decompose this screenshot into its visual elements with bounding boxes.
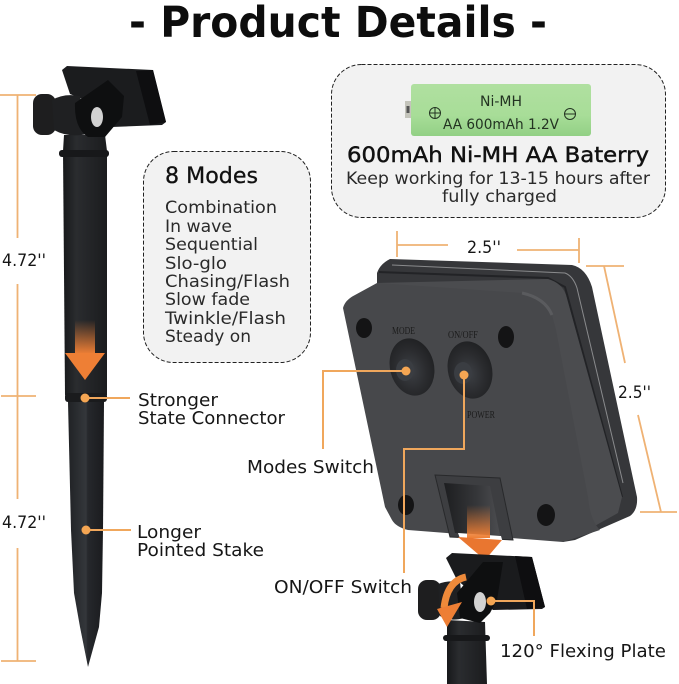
button labels xyxy=(392,325,495,421)
device photo xyxy=(343,259,637,560)
mounting plate xyxy=(62,66,166,127)
knob xyxy=(33,94,56,135)
battery heading: 600mAh Ni-MH AA Baterry xyxy=(347,143,649,167)
list of modes: Steady on xyxy=(165,327,251,347)
icon: battery: Ni-MH xyxy=(480,94,522,110)
stake product photo xyxy=(33,66,166,667)
battery description: Keep working for 13-15 hours after xyxy=(346,169,650,189)
button labels: ON/OFF xyxy=(448,329,478,341)
feature labels: ON/OFF Switch xyxy=(274,578,412,598)
bracket xyxy=(435,475,513,540)
hub xyxy=(52,95,88,135)
feature labels xyxy=(137,391,666,662)
dimension labels: 2.5'' xyxy=(618,383,651,403)
feature labels: Longer xyxy=(137,523,202,543)
feature labels: Pointed Stake xyxy=(137,541,264,561)
heading: 8 modes: 8 Modes xyxy=(165,164,258,189)
buttons xyxy=(384,334,440,400)
device back shell xyxy=(377,259,637,542)
battery description: fully charged xyxy=(442,187,557,207)
dimension labels xyxy=(2,238,651,533)
mounting holes xyxy=(356,318,555,526)
icon: downward arrow xyxy=(65,320,105,380)
list of modes: Sequential xyxy=(165,235,258,255)
panel: 8 modes xyxy=(144,152,310,362)
flexing plate photo xyxy=(418,553,545,684)
list of modes: Slow fade xyxy=(165,290,250,310)
list of modes: Slo-glo xyxy=(165,254,227,274)
list of modes xyxy=(164,198,290,347)
dimension labels: 2.5'' xyxy=(467,238,501,258)
battery description xyxy=(346,169,650,207)
icon: arrow into plate xyxy=(458,505,502,560)
callout lines and dots xyxy=(80,366,534,636)
feature labels: Modes Switch xyxy=(247,458,374,478)
icon: battery: AA 600mAh 1.2V xyxy=(443,117,559,133)
button labels: POWER xyxy=(467,409,495,421)
icon: battery xyxy=(405,84,591,136)
bolt xyxy=(91,107,103,127)
dimension labels: 4.72'' xyxy=(2,513,46,533)
list of modes: Twinkle/Flash xyxy=(164,309,286,329)
icon: curved arrow xyxy=(437,577,466,627)
list of modes: Chasing/Flash xyxy=(165,272,290,292)
list of modes: Combination xyxy=(165,198,277,218)
tube xyxy=(63,135,107,395)
feature labels: State Connector xyxy=(138,409,286,429)
device face xyxy=(343,283,600,542)
device side xyxy=(377,279,622,542)
dimension labels: 4.72'' xyxy=(2,251,46,271)
list of modes: In wave xyxy=(165,217,232,237)
feature labels: 120° Flexing Plate xyxy=(500,642,666,662)
stake xyxy=(68,402,104,667)
feature labels: Stronger xyxy=(138,391,219,411)
panel: battery xyxy=(332,64,666,218)
button labels: MODE xyxy=(392,325,415,337)
